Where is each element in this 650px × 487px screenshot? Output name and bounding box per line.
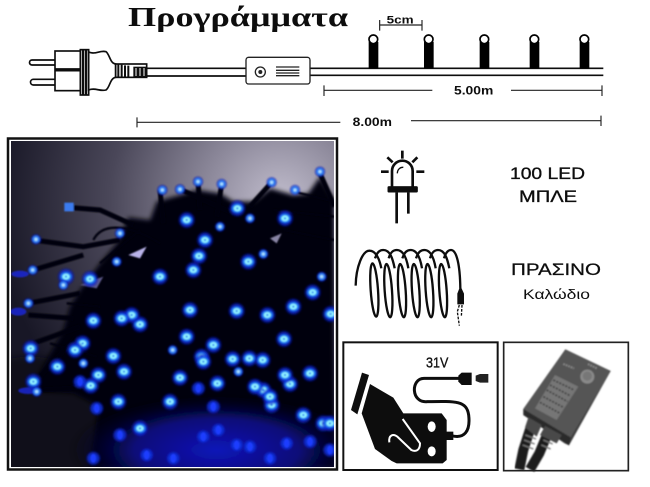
dimension: 8.00m xyxy=(137,115,601,129)
photo: blue LED light string xyxy=(0,138,367,487)
dimension: 8.00m: 8.00m xyxy=(353,115,392,129)
icon: coiled green cable xyxy=(356,250,464,326)
dimension: 5cm xyxy=(380,14,422,31)
text: LED count and colour xyxy=(510,164,585,206)
text: LED count and colour: 100 LED xyxy=(510,164,585,183)
text: cable colour xyxy=(511,260,601,302)
dimension: 5.00m: 5.00m xyxy=(454,83,493,97)
text: LED count and colour: ΜΠΛΕ xyxy=(519,187,577,206)
icon: LED lamp xyxy=(381,151,424,223)
diagram: plug, controller and LED string xyxy=(29,14,603,129)
LEDs: tips xyxy=(22,166,328,398)
title: Προγράμματα xyxy=(128,2,348,32)
icon: LED bulbs xyxy=(369,35,589,68)
cable and plug xyxy=(414,373,488,436)
voltage label: 31V xyxy=(426,356,449,372)
hand holding adapter xyxy=(351,373,453,463)
panel: controller photo xyxy=(504,342,628,471)
icon: controller box xyxy=(246,57,310,84)
dimension: 5cm: 5cm xyxy=(387,14,414,26)
cables xyxy=(519,427,553,469)
cable xyxy=(147,68,603,76)
text: cable colour: Καλώδιο xyxy=(523,286,590,302)
controller body xyxy=(523,349,611,445)
panel: 31V adapter xyxy=(343,342,498,470)
LEDs: dim reflections xyxy=(72,374,338,466)
dimension: 5.00m xyxy=(324,83,602,97)
text: cable colour: ΠΡΑΣΙΝΟ xyxy=(511,260,601,279)
icon: plug xyxy=(29,50,147,95)
LEDs: bright xyxy=(21,199,340,438)
